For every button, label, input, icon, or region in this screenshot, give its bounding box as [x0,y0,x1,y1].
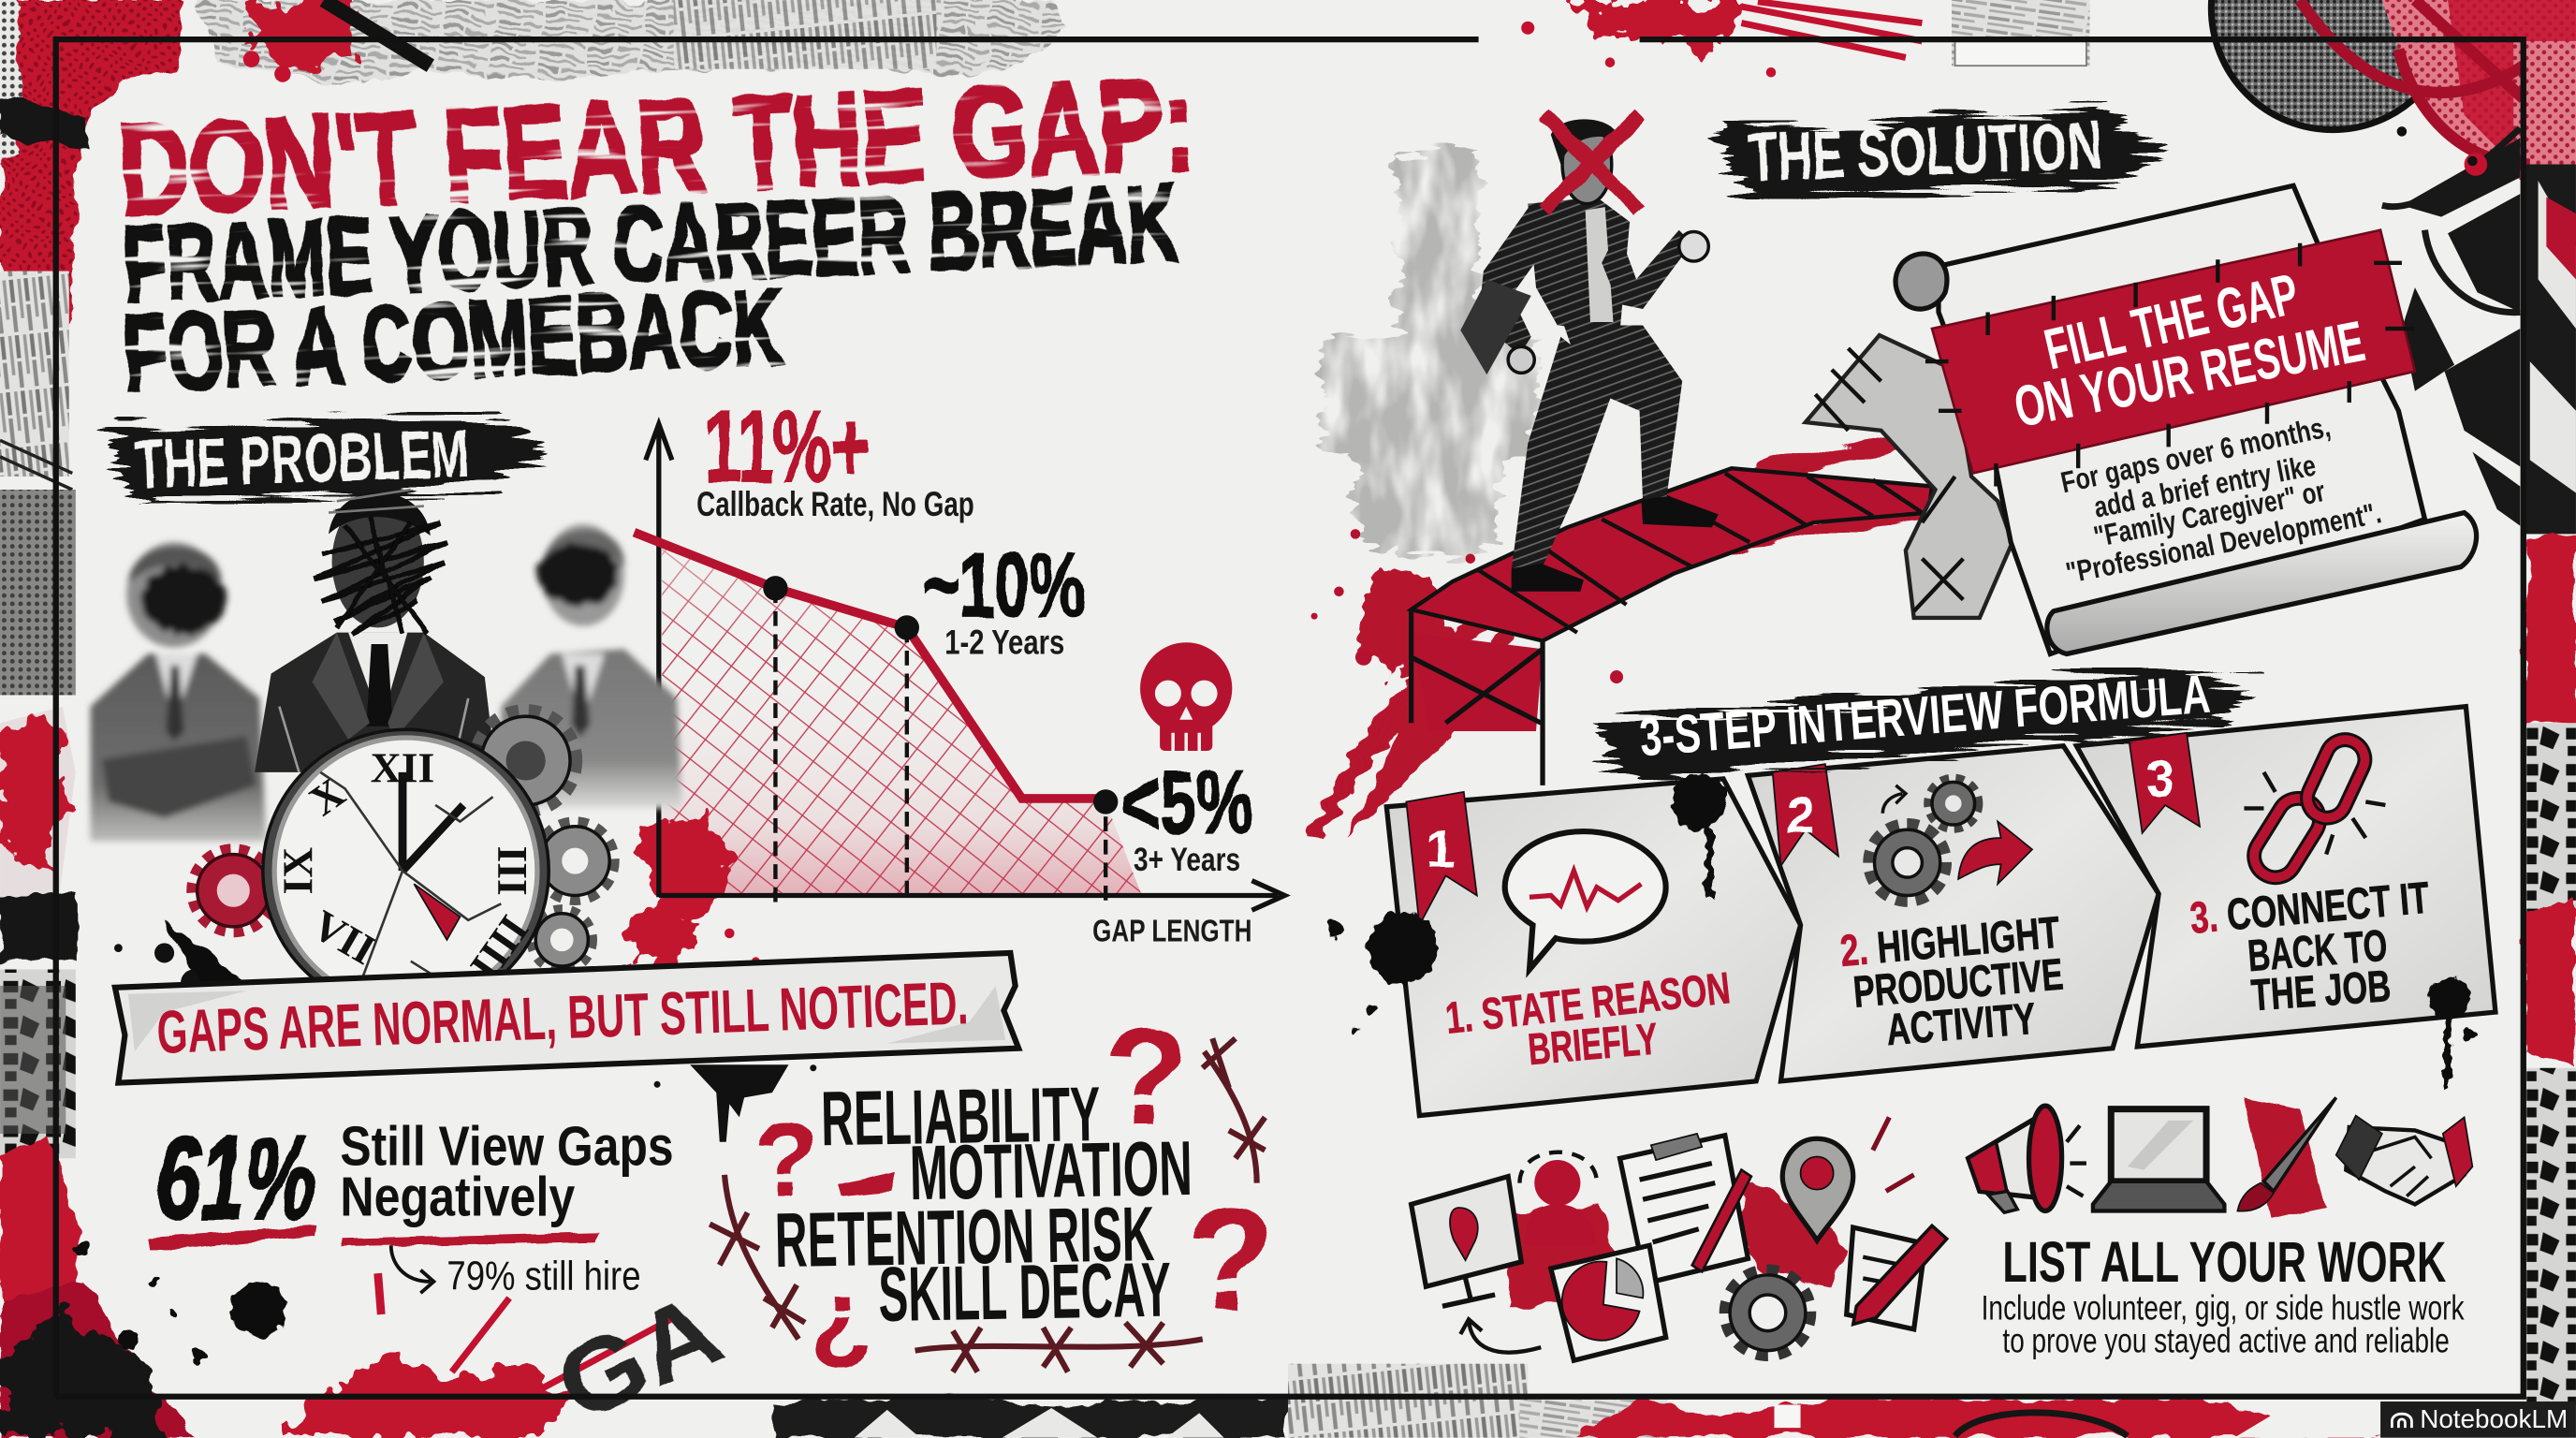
step 1 text [1443,963,1733,1075]
red underline left [148,1225,317,1249]
inverted question mark: ¿ [810,1259,872,1373]
barbed wire bottom [915,1323,1203,1372]
heading: 3-step interview formula [1597,665,2254,781]
icon: notebooklm arcs [2392,1414,2411,1428]
red splatter droplets [620,929,760,990]
step 2 text [1838,908,2065,1055]
icon: laptop [2093,1109,2224,1211]
clock numeral IIII: IIII [461,907,538,989]
clock numeral VII: VII [304,901,384,974]
icon: notepad and pencil [1847,1225,1947,1329]
icon: monitor [1412,1177,1521,1306]
step 2 line 2: PRODUCTIVE [1852,949,2065,1018]
ribbon 3 [2130,733,2200,833]
icon: speech bubble [1505,831,1666,969]
clock numeral X: X [300,768,353,825]
clock cracks [320,772,501,1003]
red x over face [1544,115,1640,211]
bridge deck [1412,468,1932,785]
step panel 1 [1386,779,1801,1116]
step 2 line 1: 2. HIGHLIGHT [1838,908,2062,976]
man legs [1512,325,1682,570]
axes [646,424,1284,910]
man head [1551,119,1618,204]
red blot [644,814,731,920]
red smear [838,1171,896,1196]
ink drip under banner [654,1064,816,1142]
banner: gaps are normal [115,953,1018,1083]
step panel 3 [2076,707,2496,1047]
title line 2: FRAME YOUR CAREER BREAK [121,162,1179,326]
collage: right edge [2522,534,2576,1405]
icon: megaphone [1969,1106,2086,1212]
step 3 text [2188,873,2432,1020]
dashed orbit around person [1519,1152,1597,1183]
icon: red gear [192,849,274,932]
spatter: lower left [76,1242,285,1362]
scroll text line 4: "Professional Development". [2063,495,2384,590]
clock numeral III: III [489,846,536,896]
step 3 line 2: BACK TO [2246,921,2389,981]
scroll text line 2: add a brief entry like [2091,448,2319,524]
icon: cracked clock [263,729,549,1012]
big number 61%: 61% [156,1112,315,1244]
icon: paintbrush [2237,1097,2336,1219]
ribbon 3: 3 [2145,749,2174,808]
collage: top edge [198,0,2089,85]
icon: gears and arrow [1869,779,2032,901]
clock numeral XII: XII [371,743,434,791]
banner headline line 2: ON YOUR RESUME [2009,309,2370,440]
label 11%+: 11%+ [705,389,869,504]
work icons cluster [1412,1097,2472,1360]
stat label line 1: Still View Gaps [340,1114,674,1177]
step 1 line 1: 1. STATE REASON [1443,963,1733,1044]
clock numeral IX: IX [274,847,322,895]
man shoes [1512,496,1719,592]
collage: left edge [0,0,198,1438]
list all your work text [1982,1230,2465,1359]
label under 5%: <5% [1122,754,1253,853]
trend line [634,533,1105,799]
ink blots on panels [1329,774,2476,1088]
banner text: GAPS ARE NORMAL, BUT STILL NOTICED. [155,968,969,1066]
concern: retention risk: RETENTION RISK [774,1191,1155,1284]
banner stitches [1925,243,2415,486]
center figure [255,490,496,772]
banner headline line 1: FILL THE GAP [2039,261,2305,383]
description line 2: to prove you stayed active and reliable [2002,1321,2450,1359]
icon: location pin [1782,1138,1853,1240]
ribbon 2: 2 [1786,785,1815,844]
scroll text line 3: "Family Caregiver" or [2091,474,2328,553]
sub-stat: 79% still hire [446,1254,641,1299]
collage: bottom edge [279,1272,2378,1438]
scroll body [1939,185,2424,654]
axis label gap length: GAP LENGTH [1092,915,1251,949]
curved arrow [1460,1319,1541,1353]
ink spatter [114,920,246,1003]
label 10%: ~10% [923,536,1084,636]
label callback rate: Callback Rate, No Gap [696,485,974,523]
icon: grey gear bottom [533,910,592,969]
label 3+ years: 3+ Years [1134,842,1240,878]
accent marks [1873,1117,1914,1191]
question mark top: ? [1104,1000,1188,1153]
icon: person [1525,1160,1597,1245]
red underline right [342,1232,600,1247]
man jacket [1460,198,1708,374]
icon: grey gear top [476,712,575,810]
step 2 line 3: ACTIVITY [1884,994,2038,1055]
scroll body text [2057,409,2384,590]
red spatter right of clock [627,907,700,966]
collage: top right tribal emblem [2202,0,2576,534]
icon: handshake [2336,1116,2472,1204]
ribbon 1 [1406,792,1477,925]
red stitched banner [1932,230,2415,473]
data points [763,576,1118,814]
left blurred figure [91,542,266,842]
barbed wire left [710,1175,805,1339]
scroll top curl [1895,254,1947,309]
arrow to sub-stat [391,1245,433,1293]
list: employer concerns [710,1000,1275,1373]
question mark left: ? [754,1101,818,1219]
concern: reliability: RELIABILITY [820,1071,1101,1162]
icon: grey gear middle [537,823,613,899]
title line 1: DON'T FEAR THE GAP: [116,50,1198,243]
ribbon 2 [1773,764,1838,866]
stitched grey patch [1806,335,2012,618]
red spatter drops [1311,529,1623,683]
ribbon 1: 1 [1426,820,1456,879]
step panel 2 [1748,746,2159,1081]
icon: clipboard [1620,1134,1748,1284]
red wash behind icons [1508,1178,1847,1306]
line chart: callback rate by gap length [620,389,1284,990]
scroll text line 1: For gaps over 6 months, [2057,409,2334,499]
label 1-2 years: 1-2 Years [944,624,1064,662]
stat label line 2: Negatively [340,1166,575,1228]
illustration: faceless hiring panel [91,490,700,1012]
step 3 line 3: THE JOB [2249,961,2393,1020]
red clock hand [414,884,460,940]
heading: the solution: THE SOLUTION [1748,109,2103,196]
step 3 line 1: 3. CONNECT IT [2188,873,2432,944]
hatched area under line [662,542,1142,895]
icon: red chain link [2244,733,2385,886]
concern: motivation: MOTIVATION [909,1125,1193,1216]
red splat at bridge base [1355,566,1454,682]
scroll bottom roll [2047,513,2477,654]
step 1 line 2: BRIEFLY [1526,1014,1660,1075]
illustration: man stepping across the bridge [1311,115,1939,838]
concern: skill decay: SKILL DECAY [878,1247,1172,1338]
heading: 3-step interview formula: 3-STEP INTERVIEW FORMULA [1637,665,2212,768]
grey wash behind man [1323,151,1536,553]
question mark right: ? [1186,1179,1275,1341]
NotebookLM badge [2380,1401,2576,1438]
title [116,50,1198,415]
title line 3: FOR A COMEBACK [121,265,785,415]
scroll: fill the gap [1895,185,2477,654]
right blurred figure [501,524,681,808]
icon: skull [1140,642,1232,751]
icon: pencil on clipboard [1692,1170,1751,1271]
clock hands [402,772,463,871]
heading: the problem: THE PROBLEM [134,417,470,503]
icon: gear [1727,1271,1808,1354]
barbed wire right [1203,1038,1265,1183]
badge text: NotebookLM [2420,1404,2568,1433]
red streak below bridge [1347,616,1528,838]
red brush arcs [1314,440,1939,838]
icon: pie chart paper [1551,1245,1666,1360]
stat: 61 percent [148,1112,674,1299]
dashed drop lines [775,588,1105,903]
